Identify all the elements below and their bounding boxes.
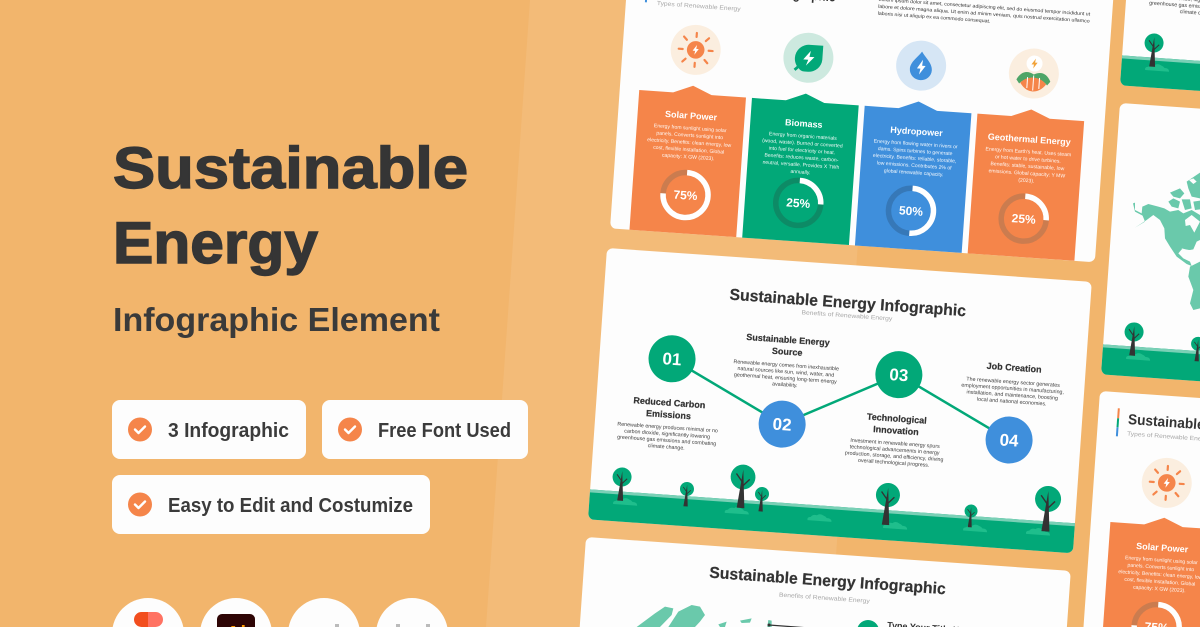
card: solar power: Energy from sunlight using solar — [1125, 555, 1198, 566]
callout dot: bottom panel — [857, 620, 879, 627]
title: Sustainable — [113, 136, 468, 201]
card: solar power: panels. Converts sunlight into — [1127, 563, 1195, 573]
card: geothermal energy: or hot water to drive turbines. — [995, 154, 1061, 165]
card: biomass: into fuel for electricity or heat. — [768, 146, 835, 156]
ground — [1120, 55, 1200, 119]
intro paragraph: labore et dolore magna aliqua. Ut enim ad minim veniam, quis nostrud exercitation ullamco — [878, 4, 1090, 25]
text fragment — [1149, 0, 1200, 20]
card: solar power: Solar Power — [1136, 541, 1189, 555]
ring: 75% — [1133, 603, 1181, 627]
ground — [588, 489, 1075, 553]
card: solar power — [629, 82, 747, 237]
ring: 50%: 50% — [898, 203, 924, 219]
card: biomass: Biomass — [785, 117, 823, 130]
card: hydropower — [855, 98, 972, 253]
card: solar power: Energy from sunlight using solar — [654, 123, 727, 134]
ring: 25% — [774, 179, 822, 227]
map fragment: bottom panel — [637, 605, 772, 627]
trees — [1143, 33, 1172, 72]
ring: 75%: 75% — [673, 188, 698, 203]
text: sustainable energy source: Sustainable Energy — [746, 332, 830, 348]
icon: geothermal — [1007, 47, 1061, 100]
text: job creation: The renewable energy sector generates — [966, 376, 1060, 389]
text: sustainable energy source — [732, 331, 841, 392]
ring: 25%: 25% — [1011, 211, 1036, 227]
card: hydropower: Hydropower — [890, 125, 944, 138]
text: reduced carbon emissions: greenhouse gas emissions and combating — [617, 434, 716, 447]
panel: world map (right) — [1101, 103, 1200, 408]
icon: tool three — [288, 598, 360, 627]
subheading: Benefits of Renewable Energy — [801, 310, 892, 323]
card: solar power: capacity: X GW (2023). — [1133, 585, 1186, 594]
panel: benefits of renewable energy — [588, 248, 1092, 553]
card: hydropower: dams. Spins turbines to generate — [878, 146, 953, 157]
text: job creation: employment opportunities in manufacturing, — [961, 383, 1064, 396]
subheading: Types of Renewable Energy — [657, 1, 741, 13]
card: biomass: annually. — [790, 169, 811, 176]
ring: 25% — [1000, 195, 1048, 243]
color bar — [645, 0, 649, 2]
feature pill: 3 infographic — [112, 400, 306, 459]
ring: 75% — [662, 171, 710, 219]
card: geothermal energy: Benefits: stable, sustainable, low — [990, 161, 1065, 172]
connector line — [668, 359, 1013, 440]
feature pill: free font — [322, 400, 528, 459]
intro paragraph — [877, 0, 1091, 32]
icon: hydropower droplet — [894, 39, 948, 92]
title — [113, 136, 468, 276]
trees — [1123, 322, 1200, 364]
text: reduced carbon emissions: Reduced Carbon — [633, 395, 706, 410]
icon: solar — [1140, 456, 1193, 510]
step 02: 02 — [772, 415, 792, 435]
text: sustainable energy source: natural sources like sun, wind, water, and — [737, 366, 834, 379]
text: reduced carbon emissions: Emissions — [646, 408, 691, 421]
text: sustainable energy source: Renewable energy comes from inexhaustible — [733, 359, 839, 372]
panel: types of renewable energy — [610, 0, 1114, 262]
card: solar power: Solar Power — [665, 109, 718, 123]
panel: world map (bottom) — [567, 537, 1071, 627]
ground — [1101, 344, 1200, 408]
feature pill: free font: Free Font Used — [378, 420, 511, 442]
intro paragraph: laboris nisi ut aliquip ex ea commodo consequat. — [877, 11, 991, 25]
text: sustainable energy source: Source — [772, 346, 803, 358]
card: solar power: electricity. Benefits: clean energy, low — [647, 137, 732, 149]
card: biomass — [742, 90, 859, 245]
trees — [610, 456, 1062, 540]
card: geothermal energy: (2023). — [1018, 178, 1035, 185]
icon: tool four — [376, 598, 448, 627]
text: sustainable energy source: geothermal heat, ensuring long-term energy — [734, 372, 837, 385]
step 02 — [757, 399, 807, 449]
ring: 50% — [887, 187, 935, 235]
panel: types of renewable energy (lower right) — [1081, 391, 1200, 627]
card: solar power: cost, flexible installation. Global — [653, 145, 724, 156]
ring: 25%: 25% — [786, 195, 811, 211]
text: reduced carbon emissions: carbon dioxide, significantly lowering — [624, 428, 710, 440]
text: job creation: local and national economies. — [977, 397, 1047, 408]
feature pill: easy to edit — [112, 475, 430, 534]
card: solar power: electricity. Benefits: clean energy, low — [1118, 569, 1200, 581]
callout line: bottom panel — [768, 624, 816, 627]
text: technological innovation — [844, 410, 946, 470]
card: hydropower: electricity. Benefits: reliable, storable, — [873, 153, 957, 165]
card: geothermal energy — [968, 106, 1085, 261]
text: reduced carbon emissions: climate change. — [648, 443, 685, 452]
step 01 — [647, 334, 697, 384]
subheading: Benefits of Renewable Energy — [779, 593, 870, 605]
text: reduced carbon emissions — [616, 394, 720, 454]
text: technological innovation: overall technological progress. — [858, 458, 930, 469]
card: biomass: neutral, versatile. Provides X TWh — [762, 160, 840, 171]
step 04: 04 — [999, 430, 1020, 451]
icon: biomass leaf — [782, 31, 835, 84]
feature pill: easy to edit: Easy to Edit and Costumize — [168, 495, 413, 517]
card: solar power — [1100, 514, 1200, 627]
card: geothermal energy: Geothermal Energy — [987, 131, 1071, 147]
text: job creation: Job Creation — [986, 361, 1042, 375]
card: geothermal energy: Energy from Earth's heat. Uses steam — [985, 146, 1071, 158]
text: technological innovation: technological advancements in energy — [849, 444, 940, 457]
text: job creation — [960, 359, 1066, 409]
text: reduced carbon emissions: Renewable energy produces minimal or no — [617, 421, 718, 434]
heading: Sustainable Energy Infographic — [729, 287, 967, 320]
card: hydropower: global renewable capacity. — [884, 168, 944, 178]
text: technological innovation: Investment in renewable energy spurs — [850, 438, 940, 450]
card: biomass: Energy from organic materials — [769, 131, 837, 142]
card: hydropower: Energy from flowing water in rivers or — [873, 139, 958, 150]
heading: Sustainable Energy Infographic — [709, 565, 946, 598]
title: Energy — [113, 211, 318, 276]
card: solar power: panels. Converts sunlight into — [656, 131, 723, 141]
icon: figma — [112, 598, 184, 627]
text: technological innovation: Technological — [867, 412, 927, 426]
text: technological innovation: Innovation — [873, 424, 919, 437]
subtitle: Infographic Element — [113, 301, 440, 338]
text: job creation: installation, and maintenance, boosting — [966, 389, 1058, 402]
text: technological innovation: production, storage, and efficiency, driving — [845, 450, 944, 463]
card: hydropower: low emissions. Contributes 2% of — [876, 160, 952, 172]
card: solar power: capacity: X GW (2023). — [662, 153, 715, 162]
icon: illustrator — [200, 598, 272, 627]
panel: partial benefits (top right) — [1120, 0, 1200, 119]
feature pill: 3 infographic: 3 Infographic — [168, 420, 289, 442]
subheading: Types of Renewable Energy — [1127, 431, 1200, 443]
card: geothermal energy: emissions. Global capacity: Y MW — [988, 168, 1066, 180]
step 04 — [984, 415, 1034, 465]
card: biomass: (wood, waste). Burned or converted — [762, 138, 843, 150]
card: solar power: cost, flexible installation. Global — [1124, 577, 1195, 588]
step 03 — [874, 350, 924, 400]
step 01: 01 — [662, 349, 682, 369]
map: north and south america — [1133, 173, 1200, 310]
card: biomass: Benefits: reduces waste, carbon- — [764, 153, 839, 164]
step 03: 03 — [889, 365, 909, 385]
color bar — [1116, 408, 1120, 436]
icon: solar — [669, 23, 722, 77]
lighter diagonal band — [486, 0, 875, 627]
text: sustainable energy source: availability. — [772, 381, 798, 389]
